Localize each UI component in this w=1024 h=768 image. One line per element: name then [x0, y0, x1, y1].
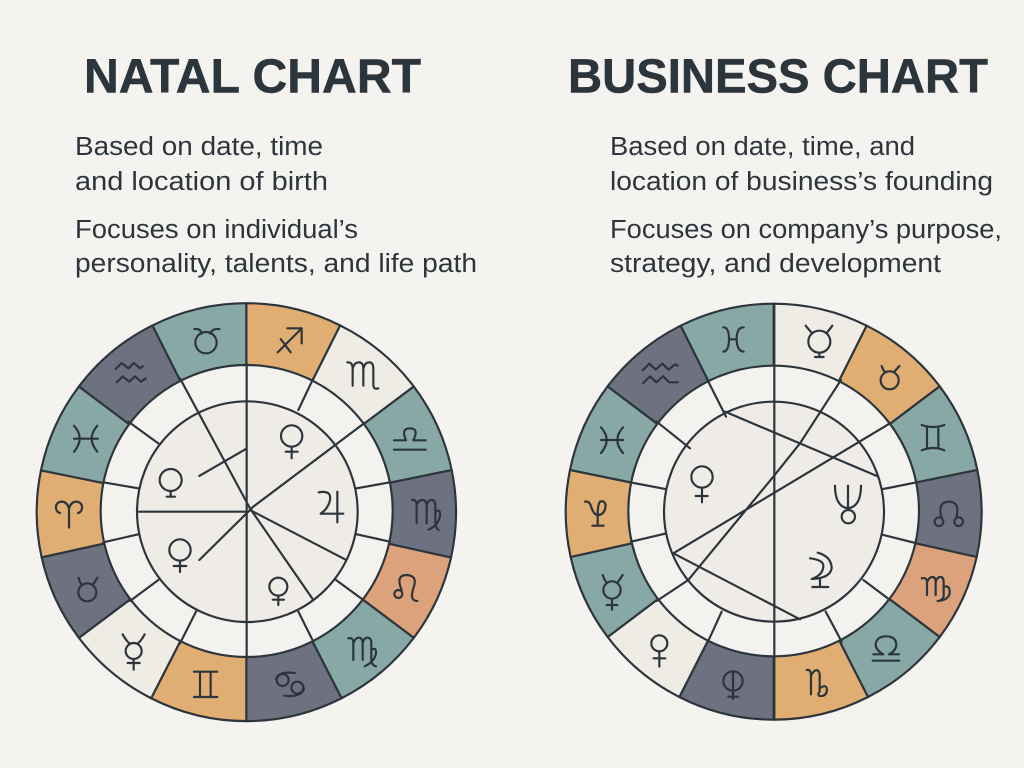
zodiac ring segments: [37, 303, 456, 721]
icon: taurus, top left: [194, 329, 219, 353]
text block: business chart focus: [610, 216, 1002, 278]
chart: business wheel: [566, 304, 982, 720]
icon: capricorn: [807, 670, 827, 696]
icon: moon symbol: [810, 553, 832, 587]
icon: taurus, slate: [78, 578, 97, 601]
icon: venus, inner upper right: [281, 425, 302, 458]
icon: venus, inner lower right: [269, 578, 287, 605]
icon: venus, cream: [651, 635, 667, 667]
house lines: [103, 363, 390, 658]
chart: natal wheel: [37, 303, 456, 721]
icon: scorpio: [347, 362, 378, 389]
icon: leo: [394, 575, 417, 601]
text block: natal chart focus: [75, 216, 477, 278]
icon: node: [935, 502, 963, 526]
icon: pisces: [74, 426, 98, 452]
icon: aquarius: [643, 364, 678, 383]
text block: business chart basis: location of business’s founding: [610, 168, 993, 196]
text block: natal chart focus: personality, talents, and life path: [75, 250, 477, 278]
heading: natal chart: NATAL CHART: [84, 50, 421, 104]
icon: gemini, teal: [922, 425, 944, 450]
text block: business chart basis: [610, 133, 993, 196]
panel: business chart: [566, 50, 1002, 720]
text block: natal chart basis: [75, 133, 328, 196]
icon: aquarius: [116, 363, 146, 382]
icon: neptune: [835, 486, 861, 523]
text block: natal chart basis: Based on date, time: [75, 133, 323, 161]
house lines: [630, 304, 917, 719]
heading: business chart: BUSINESS CHART: [568, 50, 988, 104]
icon: taurus, orange: [881, 366, 899, 389]
icon: pisces, top: [723, 327, 744, 352]
icon: aries: [56, 502, 82, 528]
icon: pluto: [723, 671, 743, 699]
icon: jupiter: [319, 492, 343, 522]
icon: mercury without cross, top right: [806, 326, 832, 357]
icon: virgo, peach: [922, 577, 950, 601]
text block: business chart focus: strategy, and development: [610, 250, 941, 278]
icon: virgo teal: [348, 638, 376, 666]
text block: business chart focus: Focuses on company’s purpose,: [610, 216, 1002, 244]
icon: mercury, teal: [603, 575, 623, 610]
icon: gemini: [194, 672, 217, 697]
icon: venus without cross, inner left: [160, 469, 182, 497]
icon: sagittarius: [278, 328, 302, 352]
zodiac ring segments: [566, 304, 982, 720]
icon: venus, inner lower left: [169, 539, 191, 572]
icon: virgo slate: [412, 500, 440, 530]
icon: venus, inner left: [691, 466, 713, 502]
icon: pisces, left: [601, 427, 623, 453]
icon: omega libra: [873, 636, 899, 661]
icon: libra: [394, 428, 426, 450]
icon: mercury: [123, 634, 145, 670]
text block: business chart basis: Based on date, time, and: [610, 133, 915, 161]
icon: cancer: [276, 673, 304, 696]
text block: natal chart basis: and location of birth: [75, 168, 328, 196]
panel: natal chart: [37, 50, 477, 721]
text block: natal chart focus: Focuses on individual’s: [75, 216, 358, 244]
icon: psi, orange: [585, 501, 606, 526]
